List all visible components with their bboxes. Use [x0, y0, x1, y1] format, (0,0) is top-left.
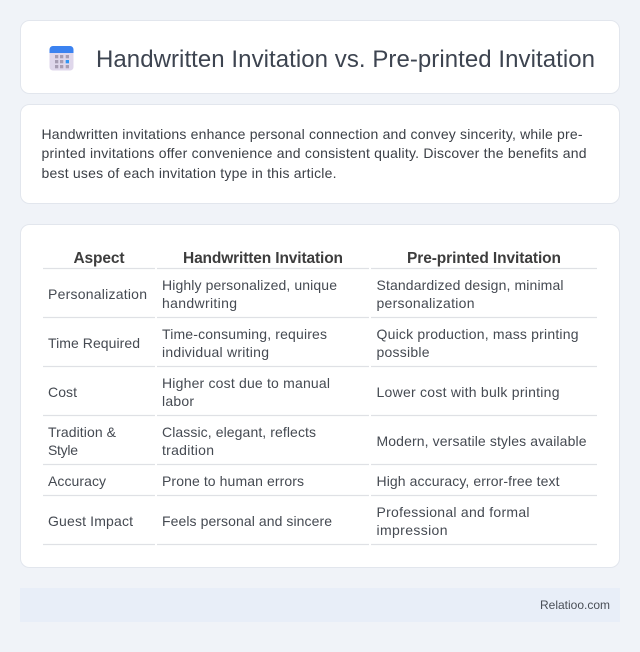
table header row: Pre-printed Invitation [407, 250, 561, 267]
intro text: Handwritten invitations enhance personal connection and convey sincerity, while pre- [42, 126, 583, 142]
row: accuracy: High accuracy, error-free text [376, 473, 560, 489]
table header row: Handwritten Invitation [183, 250, 343, 267]
row: time required: Time-consuming, requires [162, 326, 327, 342]
footer [20, 588, 620, 622]
panel: title header [20, 20, 620, 94]
table header row [74, 250, 561, 267]
row: tradition and style [48, 424, 587, 458]
row: guest impact: Guest Impact [48, 513, 133, 529]
row: time required: possible [376, 344, 430, 360]
row: time required: Time Required [48, 335, 140, 351]
table row lines [43, 268, 597, 544]
row: guest impact [48, 504, 530, 538]
row: personalization: personalization [376, 295, 474, 311]
row: time required: individual writing [162, 344, 269, 360]
row: personalization: Highly personalized, unique [162, 277, 337, 293]
row: personalization: Personalization [48, 286, 147, 302]
row: personalization: handwriting [162, 295, 237, 311]
panel: comparison table [20, 224, 620, 568]
row: tradition and style: Style [48, 442, 78, 458]
row: time required [48, 326, 578, 360]
intro text: best uses of each invitation type in this article. [42, 165, 336, 181]
row: guest impact: Feels personal and sincere [162, 513, 332, 529]
row: accuracy: Prone to human errors [162, 473, 304, 489]
row: guest impact: impression [376, 522, 448, 538]
row: tradition and style: Tradition & [48, 424, 117, 440]
intro text: printed invitations offer convenience and consistent quality. Discover the benefits and [42, 145, 586, 161]
footer credit: Relatioo.com [540, 598, 610, 612]
row: cost [48, 375, 560, 409]
row: cost: Cost [48, 384, 77, 400]
row: accuracy: Accuracy [48, 473, 106, 489]
row: personalization: Standardized design, minimal [376, 277, 564, 293]
row: time required: Quick production, mass printing [376, 326, 578, 342]
row: tradition and style: Modern, versatile styles available [376, 433, 587, 449]
row: cost: Higher cost due to manual [162, 375, 330, 391]
row: tradition and style: Classic, elegant, reflects [162, 424, 316, 440]
row: personalization [48, 277, 564, 311]
panel: introduction [20, 104, 620, 204]
icon: calendar [50, 46, 74, 70]
row: guest impact: Professional and formal [376, 504, 530, 520]
row: accuracy [48, 473, 560, 489]
table header row: Aspect [74, 250, 124, 267]
row: cost: Lower cost with bulk printing [376, 384, 560, 400]
title: Handwritten Invitation vs. Pre-printed Invitation [96, 46, 595, 73]
row: tradition and style: tradition [162, 442, 214, 458]
row: cost: labor [162, 393, 194, 409]
intro text [42, 126, 586, 181]
